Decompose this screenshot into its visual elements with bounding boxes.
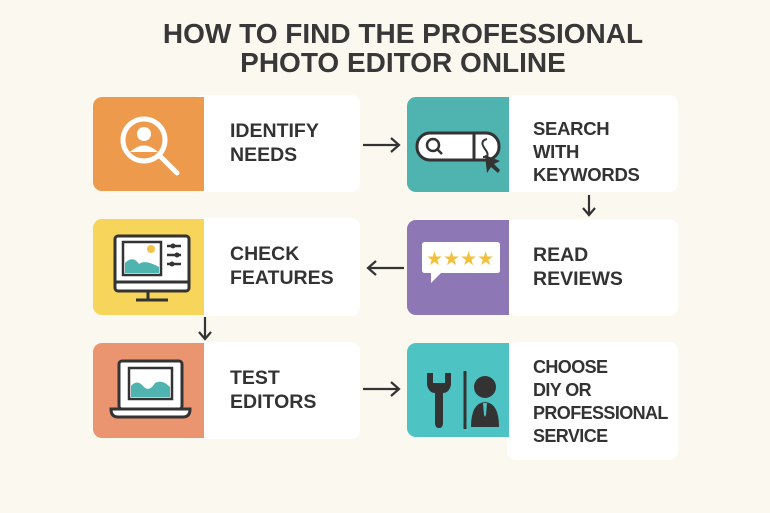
text: TEST [230,367,280,389]
text: CHOOSE [533,357,607,377]
icon: person magnifier [93,97,204,191]
arrow down 2 [198,317,212,341]
text: EDITORS [230,391,316,413]
card: check features [93,218,360,316]
arrow left [366,260,404,276]
text: SEARCH [533,118,609,139]
icon: review bubble [407,220,509,315]
text: NEEDS [230,144,297,166]
card: search [407,95,678,192]
icon: wrench and person [407,343,509,437]
text: PROFESSIONAL [533,403,668,423]
text [533,118,640,185]
text: DIY OR [533,380,591,400]
text [230,367,316,413]
title [163,18,643,78]
text: IDENTIFY [230,120,319,142]
text: READ [533,244,588,266]
text: SERVICE [533,426,608,446]
text: FEATURES [230,267,334,289]
arrow right 1 [363,137,401,153]
text [533,244,623,290]
card: read reviews [407,219,678,316]
arrow down 1 [582,195,596,217]
text [533,357,668,446]
icon: review bubble: ★★★★ [426,248,494,270]
card: choose DIY or professional [407,342,678,460]
text: REVIEWS [533,268,623,290]
title: HOW TO FIND THE PROFESSIONAL [163,18,643,49]
card: test editors [93,342,360,439]
icon: laptop [93,343,204,438]
text: CHECK [230,243,299,265]
icon: search bar [407,97,509,192]
card: identify needs [93,95,360,192]
arrow right 2 [363,381,401,397]
title: PHOTO EDITOR ONLINE [240,47,566,78]
text [230,120,319,166]
text: WITH [533,141,579,162]
text [230,243,334,289]
text: KEYWORDS [533,164,640,185]
icon: monitor [93,219,204,315]
